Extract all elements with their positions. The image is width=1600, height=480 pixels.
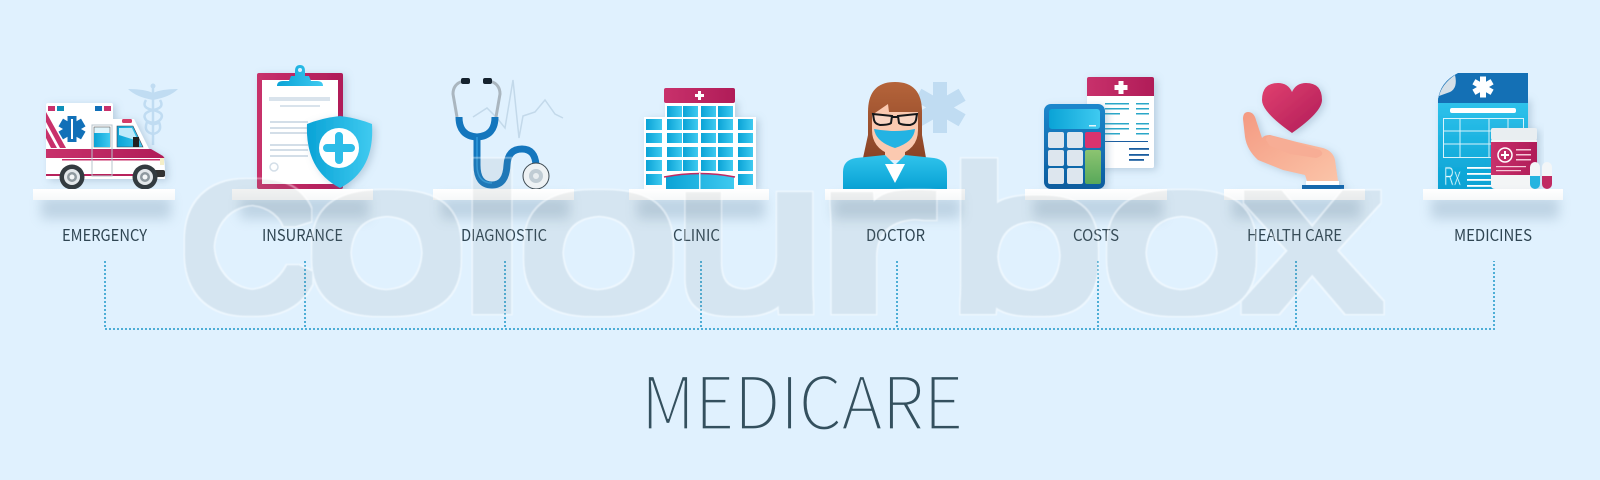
label: clinic: CLINIC [673, 222, 720, 246]
icon: ecg line [473, 80, 563, 138]
label: health care: HEALTH CARE [1247, 222, 1342, 246]
panel: diagnostic [433, 78, 574, 246]
shelf: costs [1025, 189, 1167, 219]
watermark: o [518, 120, 679, 352]
panel: insurance [232, 65, 373, 246]
shelf: health care [1224, 189, 1365, 219]
panel: clinic [629, 88, 769, 246]
watermark: b [948, 129, 1104, 350]
icon: calculator [1044, 104, 1105, 189]
icon: shield [307, 116, 372, 188]
shelf: clinic [629, 189, 769, 219]
shelf: insurance [232, 189, 373, 219]
panel: costs [1025, 77, 1167, 246]
shelf: diagnostic [433, 189, 574, 219]
icon: pill bottle [1491, 128, 1537, 189]
watermark: u [673, 120, 826, 352]
watermark: C [181, 150, 314, 346]
icon: stethoscope [453, 78, 549, 189]
panel: medicines [1423, 73, 1563, 246]
watermark: x [1244, 117, 1381, 353]
icon: ambulance [46, 103, 165, 190]
label: emergency: EMERGENCY [62, 222, 147, 246]
panel: emergency [33, 84, 178, 246]
watermark: o [1101, 120, 1262, 352]
watermark: r [811, 120, 937, 352]
title: MEDICARE [641, 345, 963, 450]
label: insurance: INSURANCE [262, 222, 343, 246]
shelf: emergency [33, 189, 175, 219]
icon: hospital building [644, 88, 756, 189]
icon: heart [1262, 83, 1322, 133]
icon: prescription sheet: Rx [1444, 161, 1461, 191]
shelf: doctor [825, 189, 965, 219]
watermark [181, 117, 1381, 353]
dotted connector [105, 261, 1494, 329]
icon: rear wheel [60, 164, 84, 190]
label: medicines: MEDICINES [1454, 222, 1532, 246]
label: doctor: DOCTOR [866, 222, 925, 246]
shelf: medicines [1423, 189, 1563, 219]
icon: doctor [843, 82, 947, 189]
icon: front wheel [132, 164, 158, 190]
watermark: l [457, 129, 527, 351]
label: costs: COSTS [1073, 222, 1119, 246]
icon: clipboard [257, 65, 343, 189]
icon: capsules [1530, 162, 1552, 189]
icon: medical bill [1087, 77, 1154, 168]
panel: health care [1224, 83, 1365, 246]
panel: doctor [825, 82, 966, 246]
label: diagnostic: DIAGNOSTIC [461, 222, 547, 246]
icon: hand [1243, 112, 1344, 189]
icon: caduceus [128, 84, 178, 145]
icon: star of life [914, 82, 966, 133]
watermark: o [306, 120, 467, 352]
icon: prescription sheet [1438, 73, 1528, 191]
